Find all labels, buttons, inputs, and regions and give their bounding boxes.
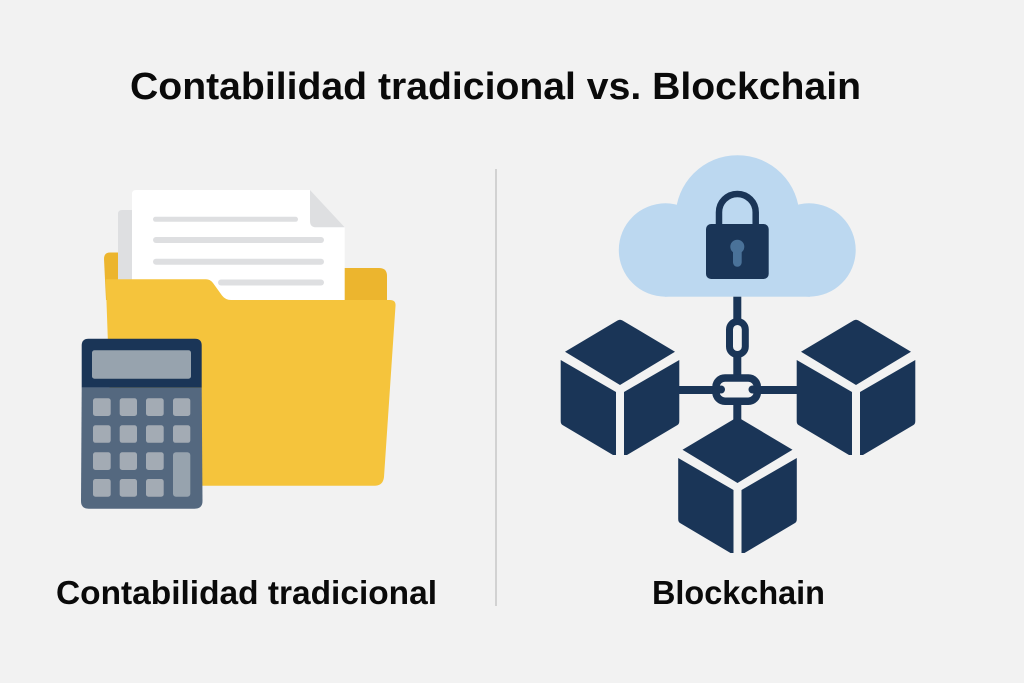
- icon: documents: [118, 190, 345, 305]
- calculator keys: [93, 398, 190, 497]
- chain link vertical: [730, 322, 745, 354]
- chain connectors: [679, 297, 797, 421]
- divider between panels: [495, 169, 497, 606]
- panel: blockchain illustration: [561, 155, 915, 553]
- label: blockchain: Blockchain: [652, 574, 825, 611]
- icon: calculator: [81, 339, 202, 509]
- icon: folder front: [106, 279, 396, 486]
- label: traditional accounting: Contabilidad tradicional: [56, 574, 437, 611]
- icon: block bottom: [678, 418, 797, 553]
- icon: block left: [561, 320, 679, 455]
- icon: cloud: [619, 155, 856, 297]
- panel: traditional accounting illustration: [81, 190, 396, 509]
- icon: block right: [797, 320, 915, 455]
- chain link horizontal: [716, 378, 757, 401]
- icon: padlock: [706, 194, 769, 279]
- icon: folder back: [104, 252, 387, 304]
- title: Contabilidad tradicional vs. Blockchain: [130, 66, 861, 108]
